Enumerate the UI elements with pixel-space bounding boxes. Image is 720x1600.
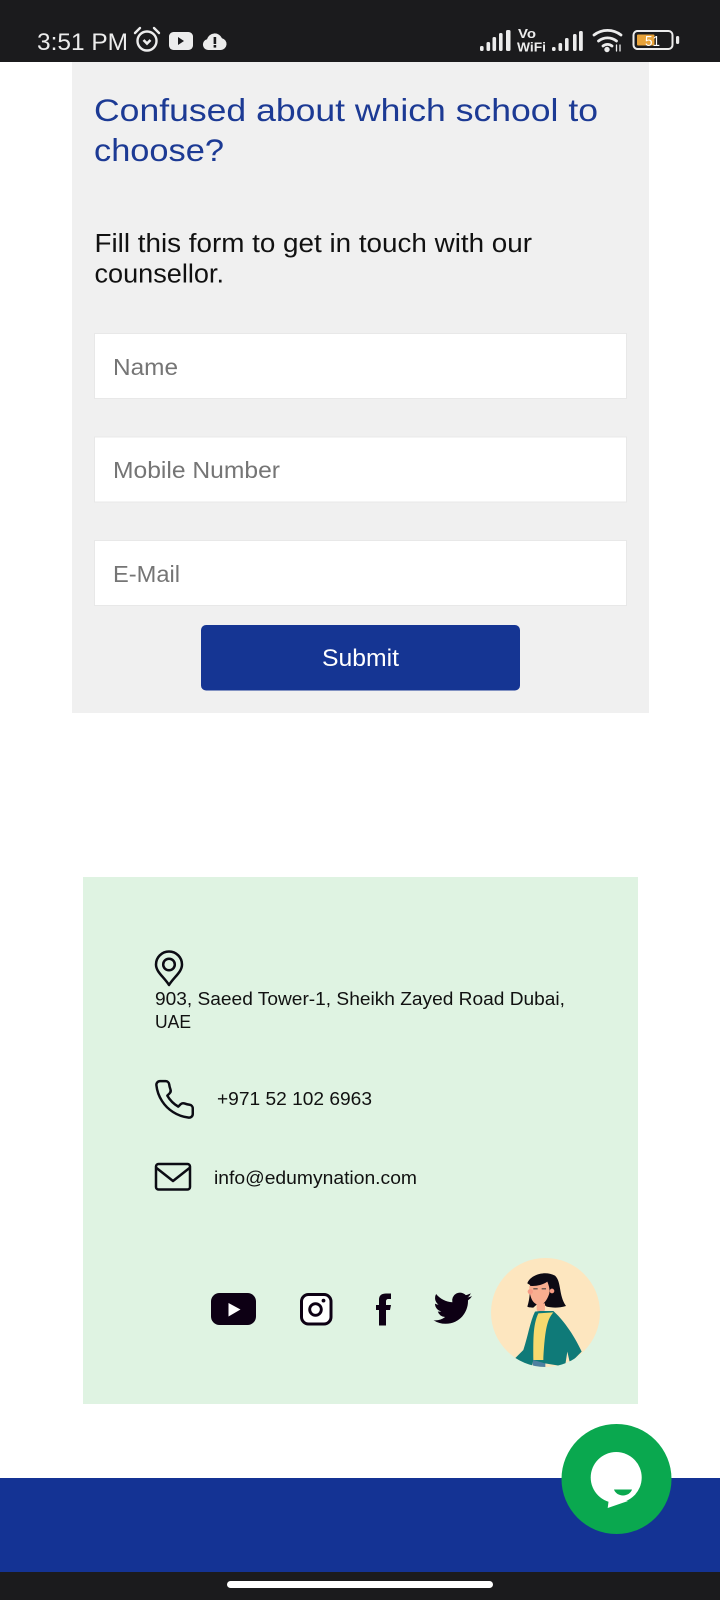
icon: alarm clock <box>135 28 159 50</box>
email: info@edumynation.com <box>214 1168 417 1188</box>
form intro text: counsellor. <box>94 261 224 289</box>
input: name: Name <box>113 354 178 380</box>
icon: facebook <box>376 1294 391 1326</box>
icon: battery <box>634 31 679 50</box>
avatar: woman illustration <box>491 1258 600 1370</box>
panel: counsellor form <box>72 62 649 713</box>
status bar <box>0 0 720 62</box>
icon: envelope <box>156 1164 190 1190</box>
icon: location pin <box>156 952 182 985</box>
input: name <box>94 334 626 398</box>
input: email: E-Mail <box>113 561 180 587</box>
form intro text: Fill this form to get in touch with our <box>94 230 533 258</box>
icon: signal 1 <box>480 30 510 51</box>
heading <box>94 92 598 168</box>
input: email <box>94 540 626 606</box>
address <box>155 989 565 1032</box>
chat button <box>562 1424 672 1534</box>
icon: signal 2 <box>552 31 583 51</box>
heading: Confused about which school to <box>94 92 598 128</box>
input: mobile number: Mobile Number <box>113 457 280 483</box>
hair <box>527 1273 566 1308</box>
panel: contact details <box>83 877 638 1404</box>
icon: cloud alert <box>203 33 227 50</box>
vowifi label <box>517 26 546 54</box>
icon: instagram <box>302 1294 331 1324</box>
jeans <box>532 1360 546 1367</box>
jacket <box>515 1311 582 1367</box>
icon: wifi <box>594 30 621 51</box>
face <box>529 1282 550 1305</box>
shirt <box>533 1312 553 1360</box>
vowifi label: Vo <box>518 26 536 41</box>
icon: video <box>169 32 193 50</box>
icon: youtube <box>211 1293 256 1325</box>
icon: battery: 51 <box>645 33 660 50</box>
status time: 3:51 PM <box>37 29 128 56</box>
navigation bar <box>0 1572 720 1600</box>
icon: phone <box>156 1081 193 1118</box>
heading: choose? <box>94 132 224 168</box>
home indicator <box>227 1581 493 1588</box>
vowifi label: WiFi <box>517 40 546 54</box>
footer bar <box>0 1478 720 1572</box>
address: 903, Saeed Tower-1, Sheikh Zayed Road Dubai, <box>155 989 565 1009</box>
form intro text <box>94 230 533 289</box>
address: UAE <box>155 1012 191 1032</box>
submit button <box>201 625 520 690</box>
icon: chat bubble <box>591 1452 642 1508</box>
icon: twitter <box>434 1293 472 1324</box>
submit button: Submit <box>322 645 399 672</box>
phone number: +971 52 102 6963 <box>217 1089 372 1109</box>
input: mobile number <box>94 437 626 502</box>
